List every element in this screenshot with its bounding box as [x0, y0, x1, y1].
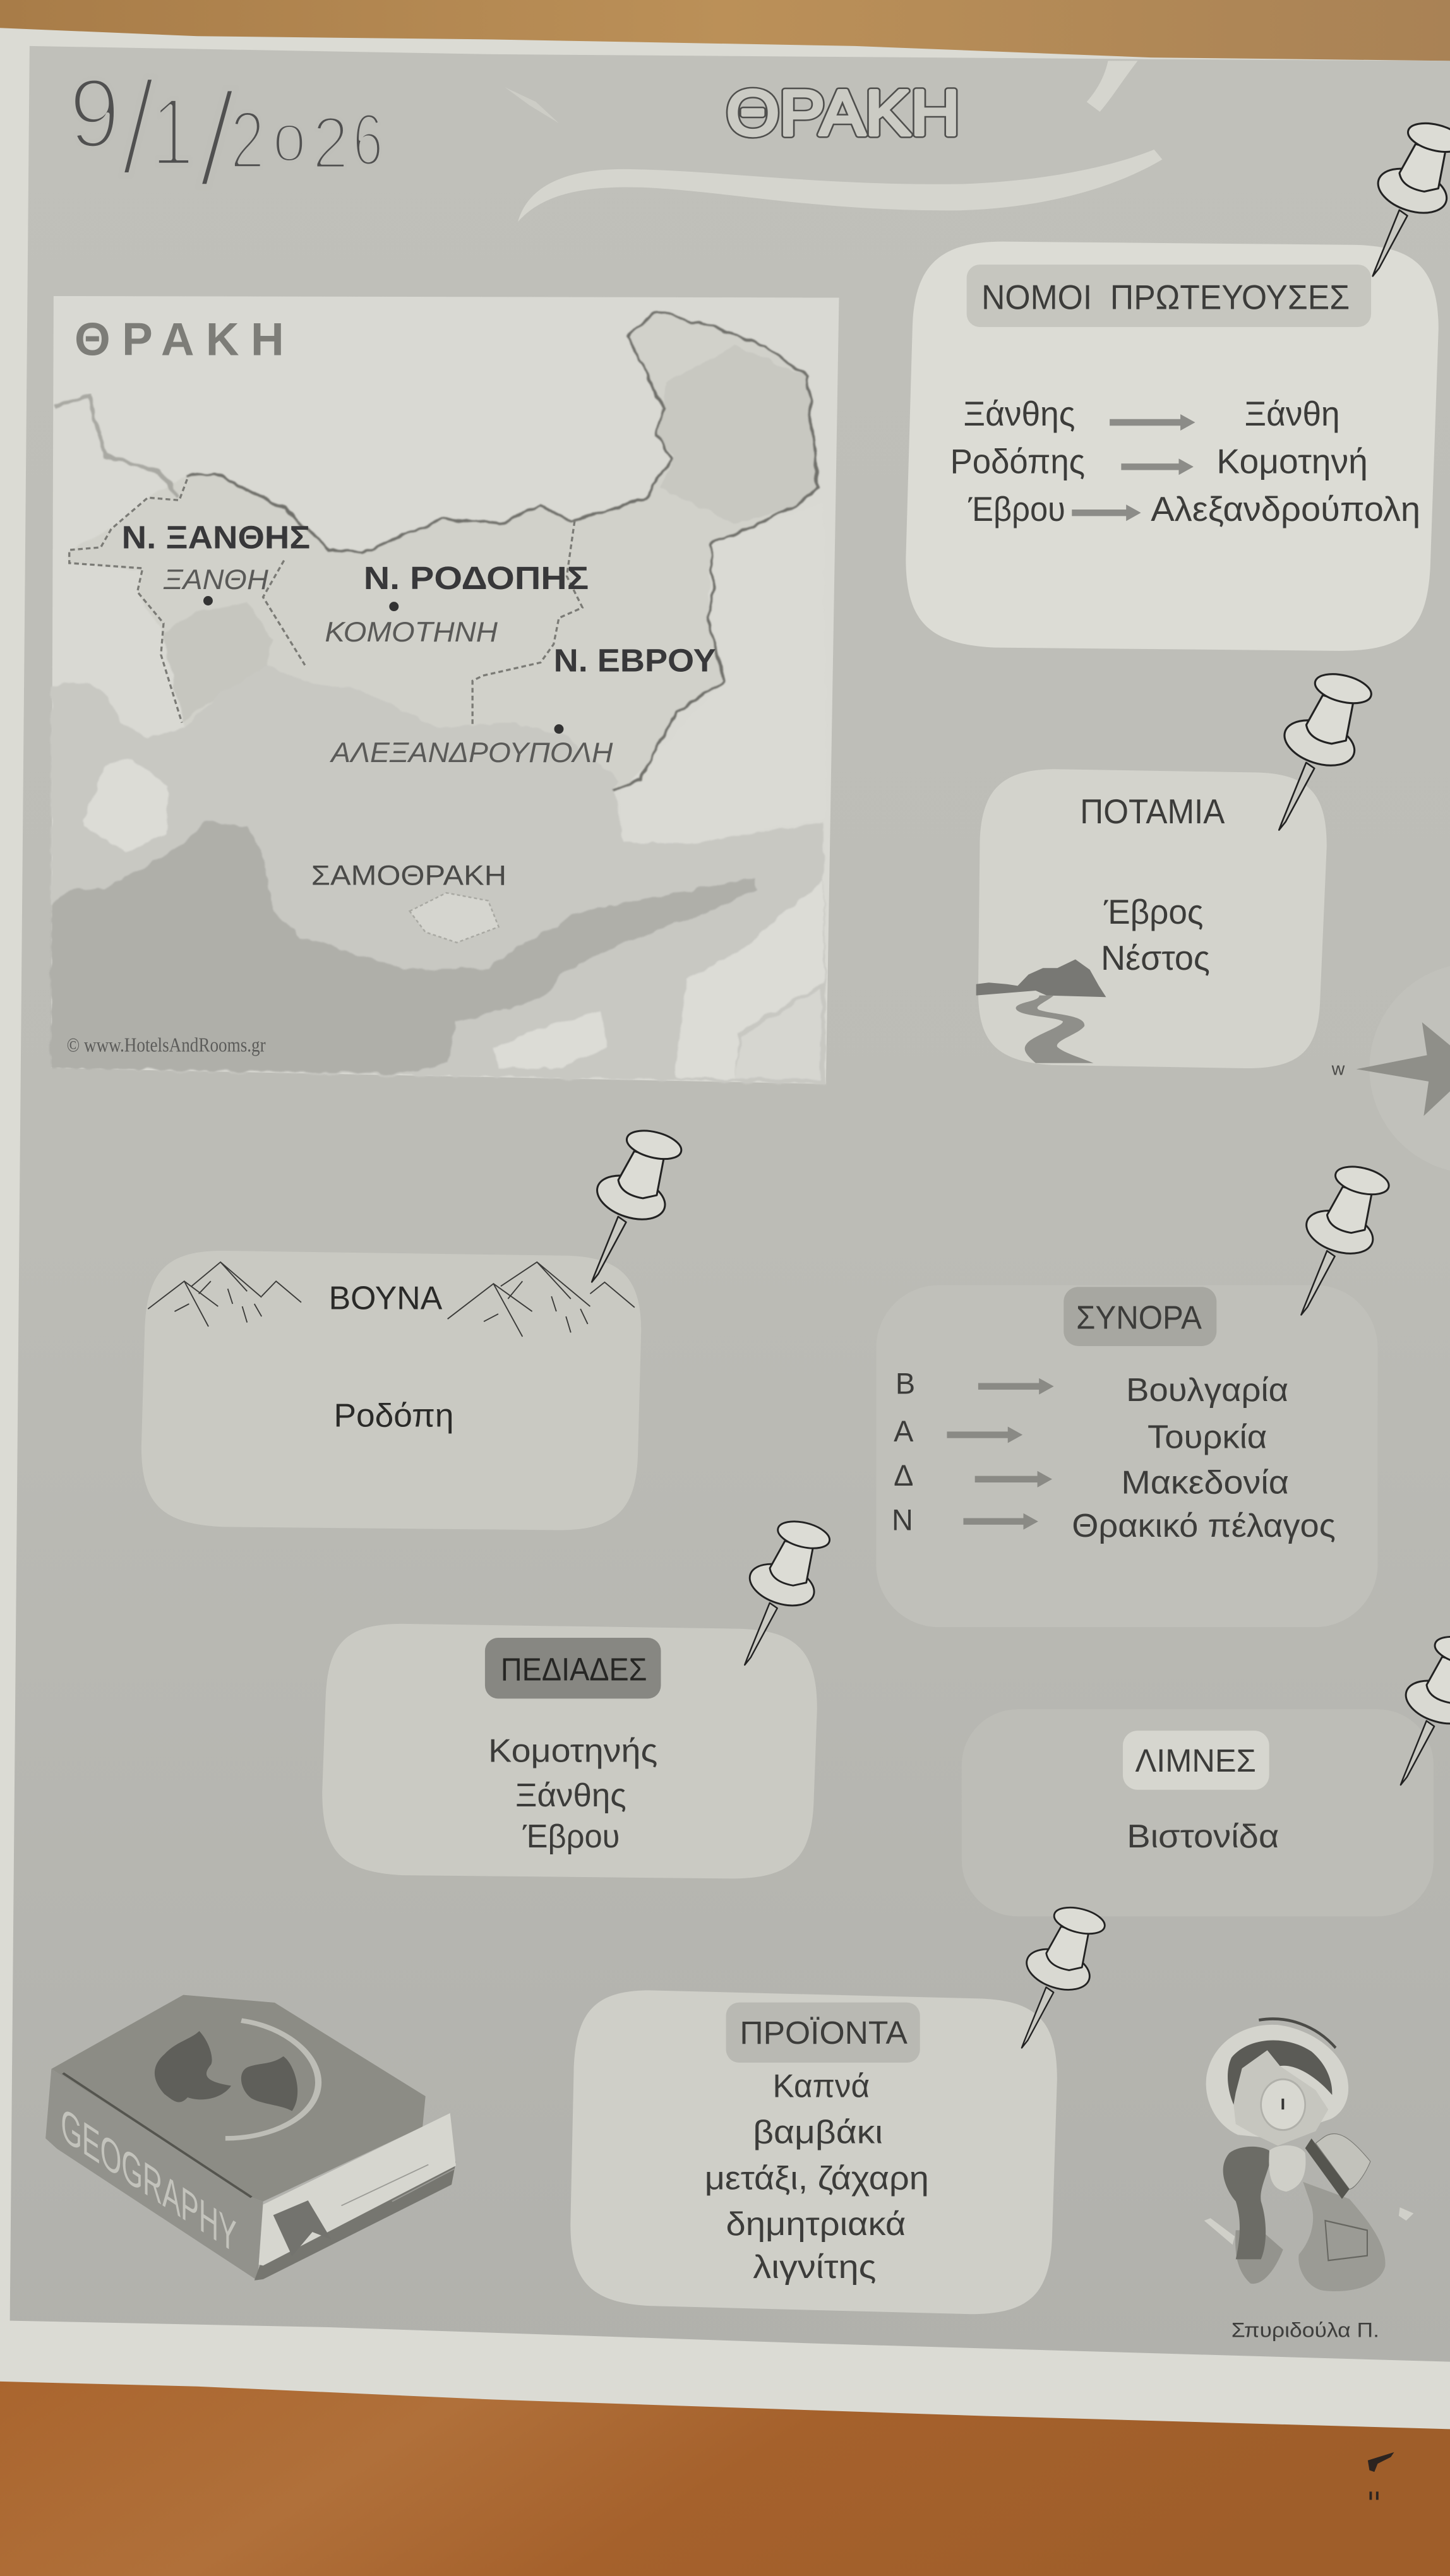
row: Evros	[968, 490, 1420, 528]
row: north	[896, 1367, 1288, 1409]
sleeve cuffs	[1204, 2207, 1413, 2245]
decorative title swooshes	[505, 61, 1162, 222]
Thrace land region	[69, 312, 818, 790]
heading chip	[726, 2003, 920, 2063]
pin: lakes panel	[1400, 1632, 1450, 1785]
panel: rivers	[976, 769, 1327, 1068]
pin: borders panel	[1301, 1162, 1392, 1315]
pin: rivers panel	[1279, 669, 1374, 830]
island: Samothraki	[410, 893, 499, 943]
label: Evros prefecture: Ν. ΕΒΡΟΥ	[554, 641, 716, 678]
panel: borders	[876, 1285, 1377, 1627]
cover hinge line	[63, 2073, 251, 2197]
row: west	[894, 1459, 1289, 1501]
island: Limnos	[493, 1011, 609, 1068]
heading: ΝΟΜΟΙ ΠΡΩΤΕΥΟΥΣΕΣ	[981, 278, 1350, 316]
city dot: Xanthi	[203, 596, 213, 605]
hand	[1315, 2133, 1370, 2189]
plain names: Ξάνθης	[515, 1777, 626, 1814]
icon: mountains right	[448, 1262, 635, 1337]
row: Xanthi: Ξάνθη	[1245, 395, 1340, 433]
panel: mountains	[141, 1251, 641, 1530]
product list: λιγνίτης	[753, 2249, 876, 2286]
row: north: Βουλγαρία	[1126, 1372, 1288, 1409]
label: Komotini city: ΚΟΜΟΤΗΝΗ	[325, 616, 498, 648]
handwritten date: 9	[69, 59, 120, 169]
heading chip	[1064, 1287, 1216, 1346]
city dot: Komotini	[389, 602, 398, 611]
river names	[1101, 893, 1210, 977]
row: north: Β	[896, 1367, 915, 1400]
row: east	[894, 1415, 1267, 1455]
handwritten date: /	[198, 64, 236, 215]
island: Thasos	[82, 760, 169, 854]
heading chip	[485, 1638, 661, 1698]
row: south: Ν	[892, 1504, 913, 1537]
product list: βαμβάκι	[753, 2114, 883, 2150]
label: Rodopi prefecture: Ν. ΡΟΔΟΠΗΣ	[364, 559, 589, 596]
hair	[1228, 2041, 1332, 2104]
city dot: Alexandroupoli	[554, 724, 563, 734]
bookmark	[273, 2200, 331, 2256]
map of Thrace	[51, 296, 839, 1084]
northern Evros shading	[656, 346, 818, 524]
row: Rodopi	[950, 443, 1368, 481]
panel: plains	[322, 1624, 817, 1878]
heading: ΠΡΟΪΟΝΤΑ	[740, 2015, 908, 2051]
row: Rodopi: Ροδόπης	[950, 443, 1085, 481]
regional dashed boundaries	[69, 479, 582, 725]
product list: δημητριακά	[726, 2206, 906, 2243]
face	[1233, 2050, 1328, 2146]
map base	[51, 296, 839, 1084]
handwritten date: 6	[352, 98, 383, 181]
island corner lower right	[734, 987, 821, 1078]
label: Samothraki: ΣΑΜΟΘΡΑΚΗ	[311, 860, 506, 891]
handwritten date: 2	[230, 94, 265, 186]
panel: lakes	[962, 1709, 1434, 1916]
icon: explorer girl with magnifying glass	[1204, 2019, 1413, 2291]
icon: mountains left	[148, 1262, 301, 1327]
Turkish land on the right	[619, 503, 826, 843]
deep sea	[51, 822, 758, 1073]
vest left side	[1235, 2230, 1283, 2284]
map copyright: © www.HotelsAndRooms.gr	[67, 1034, 266, 1056]
map title: ΘΡΑΚΗ	[75, 314, 284, 366]
author credit: Σπυριδούλα Π.	[1231, 2319, 1379, 2342]
product list: μετάξι, ζάχαρη	[705, 2160, 929, 2197]
row: west: Δ	[894, 1459, 913, 1492]
sea	[51, 665, 826, 1084]
row: Xanthi	[963, 395, 1340, 433]
panel: products	[570, 1990, 1057, 2314]
label: Alexandroupoli city: ΑΛΕΞΑΝΔΡΟΥΠΟΛΗ	[329, 737, 613, 768]
product list	[705, 2068, 929, 2286]
label: Xanthi prefecture: Ν. ΞΑΝΘΗΣ	[122, 519, 310, 556]
lake name: Βιστονίδα	[1127, 1818, 1279, 1855]
row: east: Τουρκία	[1147, 1419, 1267, 1455]
heading: ΠΟΤΑΜΙΑ	[1080, 792, 1225, 831]
panel: prefectures and capitals	[906, 242, 1439, 651]
handle of magnifier	[1305, 2138, 1350, 2199]
icon: compass rose: w	[1331, 1059, 1345, 1079]
heading chip	[1123, 1731, 1269, 1790]
row: Evros: Έβρου	[968, 490, 1065, 528]
row: south	[892, 1504, 1336, 1544]
heading: ΠΕΔΙΑΔΕΣ	[501, 1652, 647, 1688]
handwritten date	[69, 53, 383, 215]
plain names: Κομοτηνής	[488, 1733, 657, 1770]
plain names: Έβρου	[522, 1818, 620, 1855]
globe arc	[225, 2020, 318, 2138]
pin: mountains panel	[592, 1126, 684, 1282]
eye	[1281, 2099, 1284, 2109]
neck and collar	[1269, 2145, 1305, 2191]
heading: ΒΟΥΝΑ	[329, 1280, 443, 1316]
icon: compass rose	[1331, 963, 1450, 1174]
plain names	[488, 1733, 657, 1855]
heading chip	[967, 265, 1371, 327]
western border	[54, 395, 179, 498]
row: south: Θρακικό πέλαγος	[1072, 1508, 1336, 1544]
braid	[1223, 2147, 1271, 2259]
marks on the table	[1368, 2452, 1394, 2500]
handwritten date: /	[121, 53, 156, 203]
page lines	[342, 2164, 455, 2205]
hat brim	[1206, 2025, 1348, 2138]
title: ΘΡΑΚΗ: ΘΡΑΚΗ	[726, 77, 960, 149]
heading: ΛΙΜΝΕΣ	[1135, 1743, 1256, 1779]
row: Evros: Αλεξανδρούπολη	[1151, 490, 1420, 528]
river names: Νέστος	[1101, 939, 1210, 977]
row: west: Μακεδονία	[1121, 1465, 1289, 1501]
label: Xanthi city: ΞΑΝΘΗ	[163, 564, 269, 595]
book spine side	[45, 2069, 263, 2281]
row: Xanthi: Ξάνθης	[963, 395, 1075, 433]
row: Rodopi: Κομοτηνή	[1216, 443, 1368, 481]
row: east: Α	[894, 1415, 914, 1448]
icon: geography book	[45, 1995, 456, 2281]
lower cover	[255, 2161, 456, 2281]
magnifying lens	[1261, 2079, 1305, 2130]
mountain name: Ροδόπη	[333, 1398, 453, 1434]
heading: ΣΥΝΟΡΑ	[1076, 1299, 1202, 1336]
pin: plains panel	[745, 1517, 832, 1665]
vest pocket	[1325, 2221, 1367, 2260]
vest body	[1298, 2182, 1386, 2291]
islands lower right	[674, 880, 824, 1078]
hat band	[1259, 2019, 1336, 2048]
book cover	[51, 1995, 426, 2202]
map shaded relief	[51, 312, 826, 1084]
river names: Έβρος	[1103, 893, 1204, 931]
product list: Καπνά	[772, 2068, 870, 2105]
handwritten date: 0	[273, 114, 306, 172]
book title: GEOGRAPHY	[61, 2097, 237, 2265]
national border	[187, 312, 818, 790]
handwritten date: 2	[313, 102, 349, 184]
title: ΘΡΑΚΗ: ΘΡΑΚΗ	[726, 77, 960, 149]
icon: river landscape	[976, 960, 1106, 1063]
pages	[259, 2113, 456, 2265]
Xanthi plain shading	[164, 602, 273, 723]
globe continents	[155, 2031, 297, 2111]
pin: products panel	[1021, 1903, 1108, 2048]
handwritten date: 1	[151, 78, 194, 186]
pin: prefectures panel	[1372, 118, 1450, 276]
